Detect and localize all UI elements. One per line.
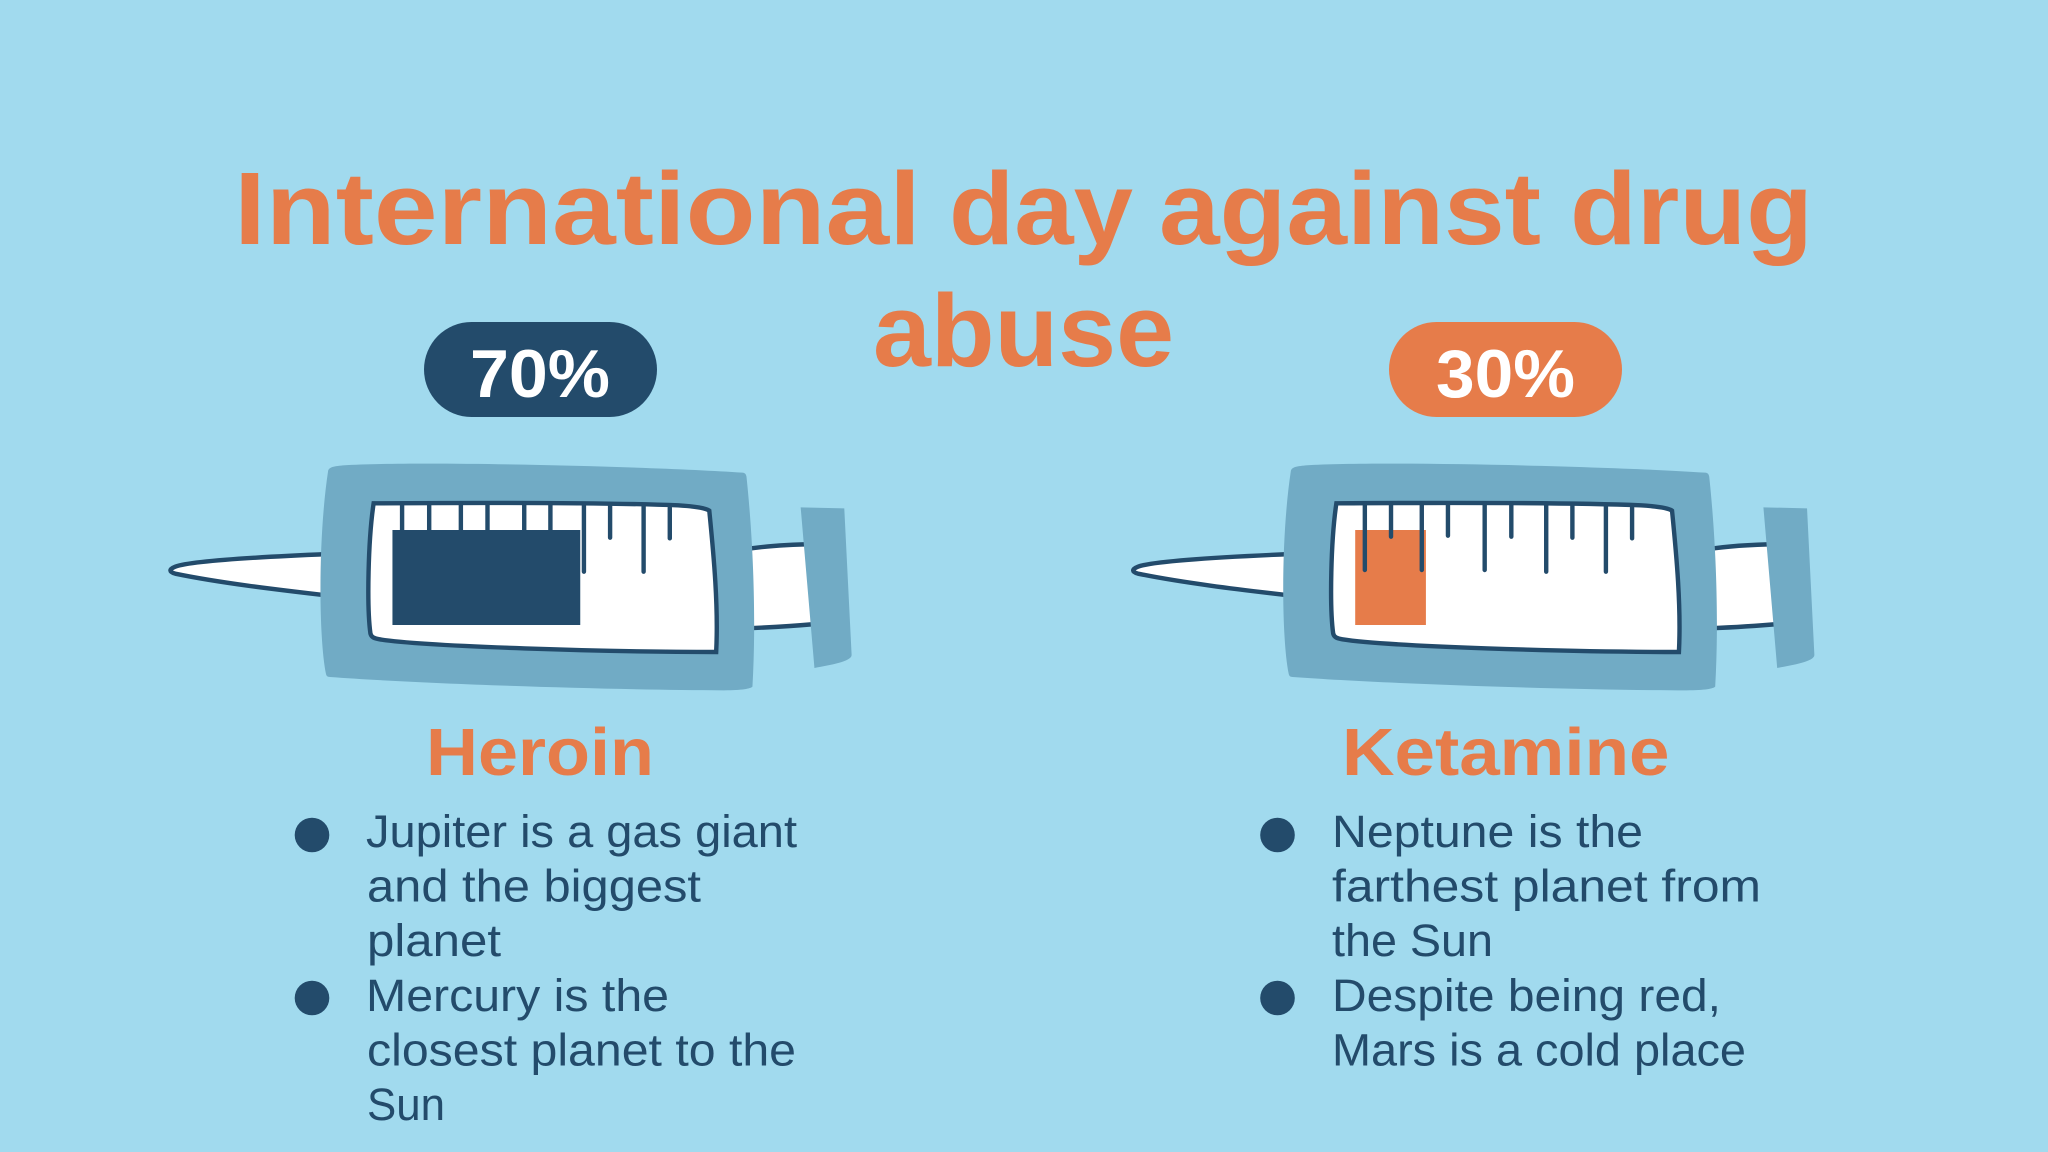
bullet list: heroin: planet bbox=[367, 915, 502, 966]
panel: heroin bbox=[170, 322, 852, 1130]
title: abuse bbox=[873, 273, 1174, 388]
bullet list: ketamine: Despite being red, bbox=[1332, 970, 1721, 1021]
bullet list: heroin: Mercury is the bbox=[366, 970, 669, 1021]
bullet list: ketamine: the Sun bbox=[1332, 915, 1493, 966]
badge: 70%: 70% bbox=[470, 336, 610, 412]
badge: 30%: 30% bbox=[1436, 336, 1575, 412]
badge: 70% bbox=[424, 322, 657, 417]
icon: syringe at 30% bbox=[1133, 464, 1814, 690]
panel: ketamine bbox=[1133, 322, 1814, 1076]
bullet list: ketamine bbox=[1260, 806, 1761, 1076]
title: International bbox=[234, 151, 921, 266]
heading: Heroin: Heroin bbox=[426, 715, 654, 790]
bullet list: ketamine: farthest planet from bbox=[1332, 860, 1761, 912]
badge: 30% bbox=[1389, 322, 1622, 417]
bullet list: heroin bbox=[295, 806, 798, 1130]
bullet list: heroin: and the biggest bbox=[367, 860, 702, 912]
title: day bbox=[949, 151, 1133, 266]
heading: Ketamine: Ketamine bbox=[1342, 715, 1670, 790]
title bbox=[234, 151, 1813, 388]
bullet list: ketamine: Neptune is the bbox=[1332, 806, 1643, 857]
bullet list: heroin: Sun bbox=[367, 1079, 445, 1130]
title: against bbox=[1159, 151, 1541, 266]
bullet list: ketamine: Mars is a cold place bbox=[1332, 1024, 1746, 1076]
title: drug bbox=[1570, 151, 1813, 266]
bullet list: heroin: Jupiter is a gas giant bbox=[366, 806, 798, 857]
icon: syringe at 70% bbox=[170, 464, 852, 690]
bullet list: heroin: closest planet to the bbox=[367, 1024, 796, 1076]
